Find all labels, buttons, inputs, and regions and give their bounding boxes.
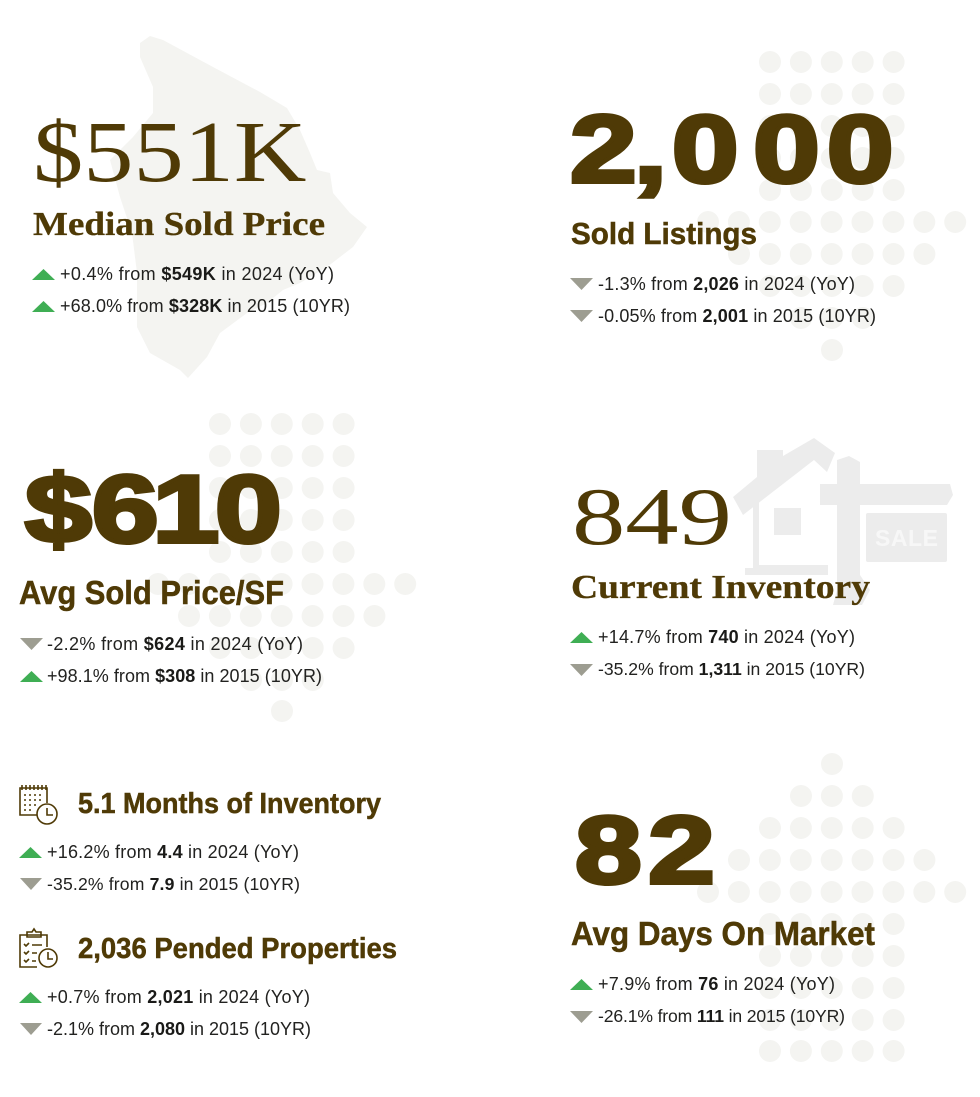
trend row: year over year [570,974,835,994]
panel: current inventory [570,438,953,679]
big number: $551K: $551K [33,104,307,200]
heading: 2,036 Pended Properties: 2,036 Pended Properties [78,933,397,965]
icon: down triangle [570,1011,593,1023]
trend row: ten year [570,659,865,679]
trend row: ten year [570,1006,845,1026]
trend text: -2.2% from $624 in 2024 (YoY) [47,634,303,654]
trend row: ten year [20,666,322,686]
background: island silhouette [110,36,367,378]
background: house with for-sale sign [733,438,953,605]
icon: down triangle [20,638,43,650]
icon: up triangle [20,671,43,682]
panel: months of inventory [19,785,381,894]
trend row: ten year [20,874,300,894]
panel: sold listings [570,62,956,350]
heading: Avg Sold Price/SF: Avg Sold Price/SF [19,574,284,611]
icon: down triangle [570,310,593,322]
heading: Sold Listings: Sold Listings [571,216,757,251]
trend row: year over year [19,987,310,1007]
icon: up triangle [32,269,55,280]
background: dotted up arrow [708,764,956,1051]
trend text: +98.1% from $308 in 2015 (10YR) [47,666,322,686]
trend row: year over year [32,264,334,284]
heading: Current Inventory: Current Inventory [571,569,870,606]
trend row: year over year [570,627,855,647]
icon: up triangle [19,992,42,1003]
icon: clipboard and clock [20,929,57,967]
heading: Avg Days On Market: Avg Days On Market [571,915,875,952]
big number: 82: 82 [575,797,715,904]
big number: 2,000: 2,000 [570,96,894,203]
trend row: year over year [20,634,303,654]
panel: pended properties [19,929,397,1039]
trend text: +0.7% from 2,021 in 2024 (YoY) [47,987,310,1007]
icon: down triangle [20,878,42,890]
trend text: -2.1% from 2,080 in 2015 (10YR) [47,1019,311,1039]
heading: 5.1 Months of Inventory: 5.1 Months of Inventory [78,788,381,820]
icon: up triangle [32,301,55,312]
trend text: +7.9% from 76 in 2024 (YoY) [598,974,835,994]
trend text: -0.05% from 2,001 in 2015 (10YR) [598,306,876,326]
panel: median sold price [32,36,367,378]
trend text: -35.2% from 7.9 in 2015 (10YR) [47,874,300,894]
trend text: +14.7% from 740 in 2024 (YoY) [598,627,855,647]
icon: calendar and clock [20,785,57,824]
trend row: year over year [570,274,855,294]
icon: down triangle [20,1023,42,1035]
background: dotted down arrow [158,424,406,711]
panel: average days on market [570,764,956,1051]
trend text: -35.2% from 1,311 in 2015 (10YR) [598,659,865,679]
icon: down triangle [570,278,593,290]
sign text: SALE [875,525,938,551]
icon: down triangle [570,664,593,676]
trend row: year over year [19,842,299,862]
heading: Median Sold Price: Median Sold Price [33,206,325,243]
trend text: -26.1% from 111 in 2015 (10YR) [598,1006,845,1026]
trend text: +68.0% from $328K in 2015 (10YR) [60,296,350,316]
trend row: ten year [20,1019,311,1039]
panel: average sold price per square foot [19,424,406,711]
trend text: +16.2% from 4.4 in 2024 (YoY) [47,842,299,862]
big number: $610: $610 [25,456,282,563]
trend row: ten year [32,296,350,316]
trend row: ten year [570,306,876,326]
background: dotted down arrow [708,62,956,350]
icon: up triangle [19,847,42,858]
trend text: +0.4% from $549K in 2024 (YoY) [60,264,334,284]
icon: up triangle [570,632,593,643]
icon: up triangle [570,979,593,990]
trend text: -1.3% from 2,026 in 2024 (YoY) [598,274,855,294]
big number: 849: 849 [572,471,732,562]
